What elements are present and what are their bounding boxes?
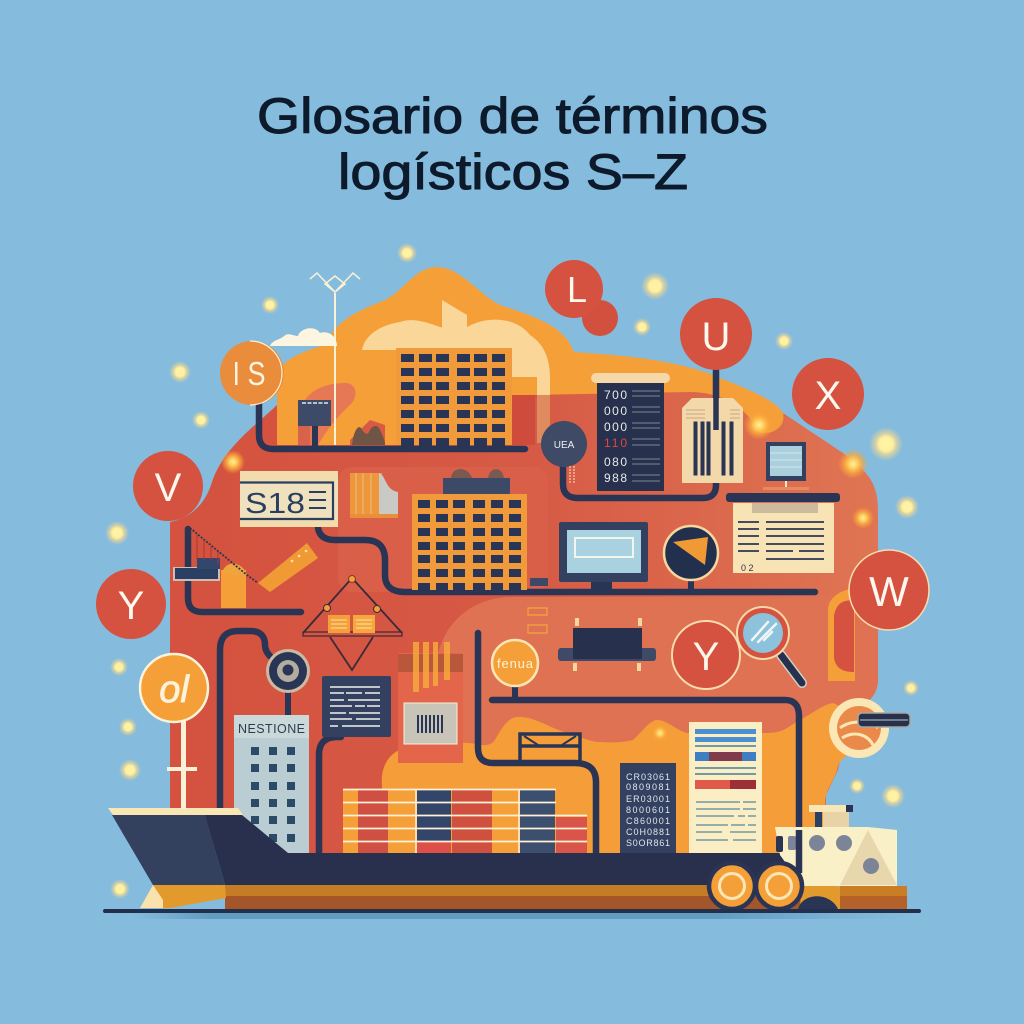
letter badge S [220, 341, 284, 405]
binary code panel: 8000601 [626, 805, 670, 815]
crane [173, 528, 258, 608]
title [257, 88, 768, 200]
NESTIONE building [234, 715, 309, 853]
S18 label: S18 [245, 488, 305, 520]
letter badge U [680, 298, 752, 370]
lower orange hills [382, 703, 870, 855]
sign board [298, 400, 331, 446]
letter badge V: V [155, 466, 182, 510]
pizza badge [664, 526, 718, 590]
ship wheels [709, 863, 802, 909]
round emblem with pill [829, 698, 910, 758]
ol sign [140, 654, 208, 809]
S18 label [240, 471, 338, 527]
letter badge X: X [815, 374, 841, 418]
shelf with document [726, 493, 840, 573]
letter badge Y centre: Y [693, 635, 719, 679]
letter badge V [133, 451, 203, 521]
number panel: 000 [604, 420, 627, 434]
big monitor [559, 522, 648, 590]
letter badge W [849, 550, 929, 630]
central building [412, 494, 527, 591]
orange red side panel [828, 588, 855, 681]
binary code panel: C0H0881 [626, 827, 670, 837]
lighter red area [437, 597, 878, 760]
ground line [103, 909, 921, 919]
number panel: 110 [604, 436, 627, 450]
NESTIONE building: NESTIONE [238, 722, 305, 736]
U pipe over document [713, 371, 719, 430]
control device [558, 618, 656, 671]
upper orange hills [258, 267, 783, 445]
report document [689, 722, 762, 853]
number panel: 080 [604, 455, 627, 469]
ship hull [108, 808, 825, 909]
barcode document [682, 398, 743, 483]
number panel: 700 [604, 388, 627, 402]
binary code panel: 0809081 [626, 782, 670, 792]
cloud [270, 328, 337, 346]
letter badge L [545, 260, 618, 336]
small monitor [763, 442, 809, 490]
title: Glosario de términos [257, 88, 768, 144]
letter badge Y centre [672, 621, 740, 689]
small cream ship [775, 805, 907, 909]
letter badge Y left [96, 569, 166, 639]
title: logísticos S–Z [338, 144, 688, 200]
orange glow dots on map [221, 410, 874, 742]
books [350, 473, 398, 518]
binary code panel: S0OR861 [626, 838, 670, 848]
shelf with document: 0 2 [741, 563, 754, 573]
number panel [591, 373, 670, 491]
magnifying glass [737, 607, 802, 683]
eye gauge [266, 649, 310, 716]
antenna [310, 273, 360, 445]
letter badge Y left: Y [118, 584, 144, 628]
UEA badge: UEA [554, 440, 575, 451]
containers [343, 789, 587, 853]
binary code panel [620, 763, 676, 853]
letter badge S: I S [232, 355, 266, 392]
letter badge W: W [869, 568, 909, 615]
crate frame [520, 734, 580, 762]
brown hump [352, 426, 385, 445]
fenua sign [492, 640, 538, 700]
orange tube [258, 543, 318, 592]
dark text board [322, 676, 391, 737]
binary code panel: C860001 [626, 816, 670, 826]
number panel: 988 [604, 471, 627, 485]
binary code panel: CR03061 [626, 772, 670, 782]
glowing dots [105, 243, 919, 899]
barcode package [398, 642, 463, 763]
letter badge L: L [567, 269, 587, 310]
scale with books [303, 576, 402, 670]
connector pipes [188, 371, 815, 873]
fenua sign: fenua [497, 656, 534, 671]
lighter panel behind central building [338, 467, 548, 592]
binary code panel: ER03001 [626, 794, 670, 804]
letter badge U: U [702, 315, 730, 359]
ol sign: ol [159, 669, 190, 711]
letter badge X [792, 358, 864, 430]
small chip [530, 578, 548, 586]
UEA badge [541, 421, 587, 483]
second building roof [443, 469, 510, 494]
top building [396, 348, 512, 446]
main red map shape [170, 352, 878, 855]
number panel: 000 [604, 404, 627, 418]
small outline icon [528, 608, 547, 633]
